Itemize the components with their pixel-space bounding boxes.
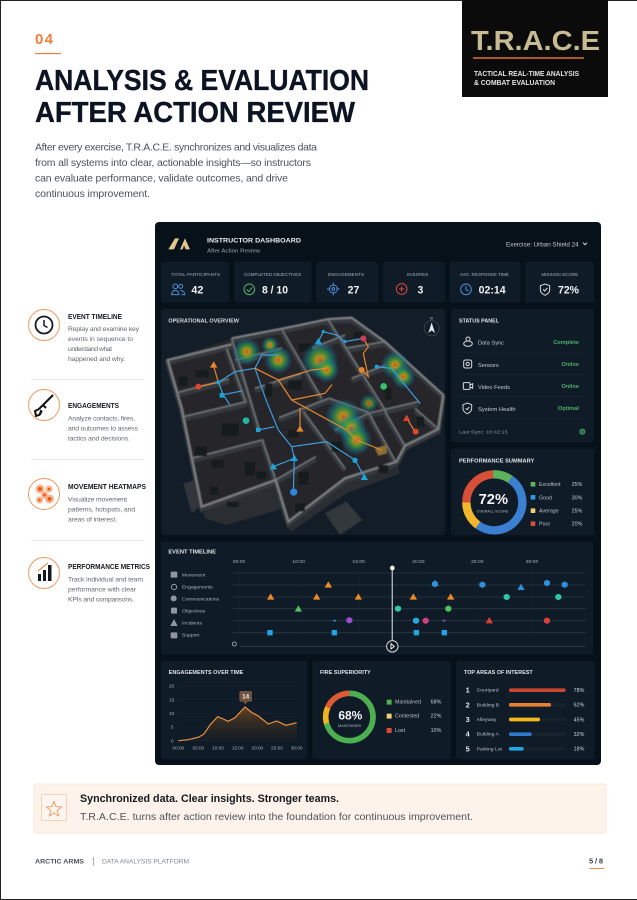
KPI cards: ENGAGEMENTS (328, 272, 364, 277)
panel: top areas of interest: 2 (466, 700, 470, 709)
score legend: Poor (539, 521, 550, 527)
feature: event timeline: understand what (68, 346, 112, 353)
track labels: Incidents (182, 621, 202, 627)
callout: T.R.A.C.E. turns after action review into the foundation for continuous improvement. (80, 811, 473, 823)
feature: event timeline (28, 310, 140, 363)
KPI cards: MISSION SCORE (541, 272, 578, 277)
intro paragraph: can evaluate performance, validate outcomes, and drive (35, 172, 288, 184)
panel: status: Online (561, 362, 579, 368)
superiority legend: Lost (395, 728, 406, 734)
panel: status: Last Sync: 10:42:15 (459, 429, 508, 435)
panel: event timeline: 30:00 (526, 559, 538, 565)
feature: movement heatmaps: MOVEMENT HEATMAPS (68, 482, 146, 491)
dashboard header: After Action Review (207, 248, 261, 254)
playback scrubber (232, 566, 586, 652)
superiority legend: Contested (395, 714, 419, 720)
compass (424, 317, 439, 336)
panel: top areas of interest: TOP AREAS OF INTEREST (464, 670, 533, 676)
superiority legend: 10% (431, 728, 442, 734)
feature: movement heatmaps (28, 478, 146, 524)
panel: event timeline: 15:00 (352, 559, 365, 565)
panel: top areas of interest: Building A (477, 732, 500, 738)
track labels (170, 572, 220, 639)
feature: performance metrics: PERFORMANCE METRICS (68, 562, 150, 571)
title: ANALYSIS & EVALUATION (35, 65, 369, 97)
panel: engagements over time: 05:00 (193, 746, 205, 751)
panel: engagements over time: 15 (169, 697, 175, 702)
score legend: Average (539, 508, 559, 514)
feature: engagements: tactics and decisions. (68, 436, 130, 442)
intro paragraph: from all systems into clear, actionable insights—so instructors (35, 157, 311, 169)
track labels: Communications (182, 596, 220, 602)
panel: top areas of interest: Alleyway (477, 717, 497, 723)
feature: event timeline: Replay and examine key (68, 326, 140, 333)
superiority legend: 68% (431, 700, 442, 706)
intro paragraph (35, 142, 317, 200)
track labels: Support (182, 633, 200, 639)
feature: event timeline: EVENT TIMELINE (68, 312, 122, 321)
panel: engagements over time (161, 661, 307, 759)
title (35, 65, 369, 129)
panel: event timeline: 25:00 (471, 559, 484, 565)
panel: performance summary: 72% (479, 492, 508, 508)
feature: engagements: Analyze contacts, fires, (68, 416, 135, 422)
score legend: Excellent (539, 482, 561, 488)
panel: top areas of interest: 45% (574, 717, 585, 723)
panel: engagements over time: 20:00 (252, 746, 264, 751)
callout: Synchronized data. Clear insights. Stronger teams. (80, 793, 339, 805)
section number (35, 31, 61, 54)
KPI cards: 02:14 (479, 284, 507, 296)
footer: ARCTIC ARMS (35, 858, 84, 866)
feature: performance metrics: KPIs and comparisons. (68, 596, 134, 604)
panel: fire superiority: MAINTAINED (338, 724, 362, 728)
KPI cards: TOTAL PARTICIPANTS (171, 272, 220, 277)
track labels: Engagements (182, 584, 213, 590)
panel: fire superiority: FIRE SUPERIORITY (320, 670, 371, 676)
panel: status: Data Sync (478, 341, 504, 347)
panel: performance summary: PERFORMANCE SUMMARY (459, 458, 535, 464)
panel: top areas of interest: 3 (466, 715, 470, 724)
dashboard header: Exercise: Urban Shield 24 (506, 242, 579, 248)
superiority legend (387, 700, 442, 734)
KPI cards: 42 (191, 284, 203, 296)
panel: top areas of interest: 32% (574, 732, 585, 738)
panel: event timeline: EVENT TIMELINE (168, 549, 216, 555)
KPI cards: 72% (558, 284, 579, 296)
dashboard header (168, 238, 587, 254)
feature: performance metrics (28, 558, 150, 604)
panel: event timeline: 10:00 (292, 559, 305, 565)
panel: engagements over time: 30:00 (291, 746, 303, 751)
score legend: Good (539, 495, 552, 501)
panel: status: System Health (478, 407, 516, 413)
feature: movement heatmaps: Visualize movement (68, 496, 127, 504)
feature: engagements: ENGAGEMENTS (68, 401, 119, 410)
panel: fire superiority: 68% (338, 708, 363, 722)
KPI cards: 8 / 10 (262, 284, 288, 296)
score legend: 25% (572, 508, 583, 514)
logo block: T.R.A.C.E (471, 25, 600, 56)
track labels: Objectives (182, 608, 206, 614)
score legend (531, 482, 583, 527)
building map (168, 318, 443, 535)
panel: status (451, 309, 594, 442)
intro paragraph: continuous improvement. (35, 188, 150, 200)
KPI cards: COMPLETED OBJECTIVES (244, 272, 301, 277)
panel: top areas of interest: 78% (574, 688, 585, 694)
panel: status: STATUS PANEL (459, 318, 500, 324)
panel: engagements over time: 0 (171, 738, 174, 743)
panel: event timeline: 00:00 (233, 559, 245, 565)
panel: status: Optimal (558, 406, 579, 412)
panel: engagements over time: ENGAGEMENTS OVER TIME (169, 670, 244, 676)
panel: top areas of interest: Parking Lot (477, 746, 502, 752)
panel heading: OPERATIONAL OVERVIEW (168, 318, 240, 324)
logo block: & COMBAT EVALUATION (474, 80, 555, 87)
logo block: TACTICAL REAL-TIME ANALYSIS (474, 71, 579, 78)
superiority legend: Maintained (395, 700, 421, 706)
panel: top areas of interest: Courtyard (477, 688, 499, 694)
feature: movement heatmaps: patterns, hotspots, and (68, 506, 135, 514)
panel: top areas of interest: Building B (477, 702, 500, 708)
footer: 5/8 (589, 856, 603, 866)
panel: engagements over time: 25:00 (271, 746, 283, 751)
map markers (195, 330, 419, 496)
feature: engagements: and outcomes to assess (68, 426, 139, 432)
score legend: 30% (572, 495, 583, 501)
KPI cards: 27 (348, 284, 359, 296)
panel: event timeline: 20:00 (412, 559, 425, 565)
feature: event timeline: events in sequence to (68, 336, 133, 343)
panel: status: Sensors (478, 363, 499, 369)
KPI cards (161, 262, 594, 303)
KPI cards: 3 (418, 284, 423, 296)
dashboard (155, 222, 601, 765)
KPI cards: INJURIES (407, 272, 428, 277)
feature: engagements (28, 390, 139, 442)
panel: engagements over time: 10:00 (212, 746, 224, 751)
feature: event timeline: happened and why. (68, 356, 125, 363)
panel: performance summary (451, 449, 594, 541)
peak tooltip (239, 691, 252, 704)
panel: engagements over time: 00:00 (173, 746, 185, 751)
panel: event timeline (161, 541, 593, 655)
footer (35, 856, 604, 869)
panel: status: Video Feeds (478, 385, 510, 391)
footer: DATA ANALYSIS PLATFORM (102, 858, 189, 866)
feature: performance metrics: Track individual and team (68, 576, 143, 584)
panel: engagements over time: 15:00 (232, 746, 244, 751)
panel: engagements over time: 10 (169, 711, 175, 716)
score legend: 20% (572, 521, 583, 527)
panel: status: Complete (553, 340, 579, 346)
panel: status: Online (561, 384, 579, 390)
panel: top areas of interest: 1 (466, 686, 470, 695)
title: AFTER ACTION REVIEW (35, 97, 356, 129)
superiority legend: 22% (431, 714, 442, 720)
panel: top areas of interest (456, 661, 594, 759)
heatmaps (233, 336, 415, 455)
callout (34, 784, 606, 833)
section number: 04 (35, 31, 54, 48)
feature: movement heatmaps: areas of interest. (68, 516, 117, 524)
score donut (455, 463, 533, 541)
dashboard header: INSTRUCTOR DASHBOARD (207, 238, 301, 245)
timeline markers (267, 580, 568, 635)
peak tooltip: 14 (242, 694, 250, 701)
logo block (462, 0, 608, 97)
panel: top areas of interest: 18% (574, 747, 585, 753)
track labels: Movement (182, 572, 206, 578)
feature: performance metrics: performance with clear (68, 586, 137, 594)
panel: performance summary: OVERALL SCORE (477, 508, 509, 513)
score legend: 25% (572, 482, 583, 488)
panel: engagements over time: 20 (169, 684, 175, 689)
panel: top areas of interest: 4 (466, 730, 471, 739)
panel: engagements over time: 5 (171, 725, 174, 730)
superiority donut (318, 686, 381, 748)
panel: top areas of interest: 5 (466, 744, 470, 753)
intro paragraph: After every exercise, T.R.A.C.E. synchronizes and visualizes data (35, 142, 317, 154)
compass: N (430, 317, 433, 321)
panel: fire superiority (312, 661, 451, 759)
panel: operational overview (161, 309, 445, 535)
KPI cards: AVG. RESPONSE TIME (460, 272, 509, 277)
movement routes (198, 332, 420, 492)
panel: top areas of interest: 62% (574, 703, 585, 709)
